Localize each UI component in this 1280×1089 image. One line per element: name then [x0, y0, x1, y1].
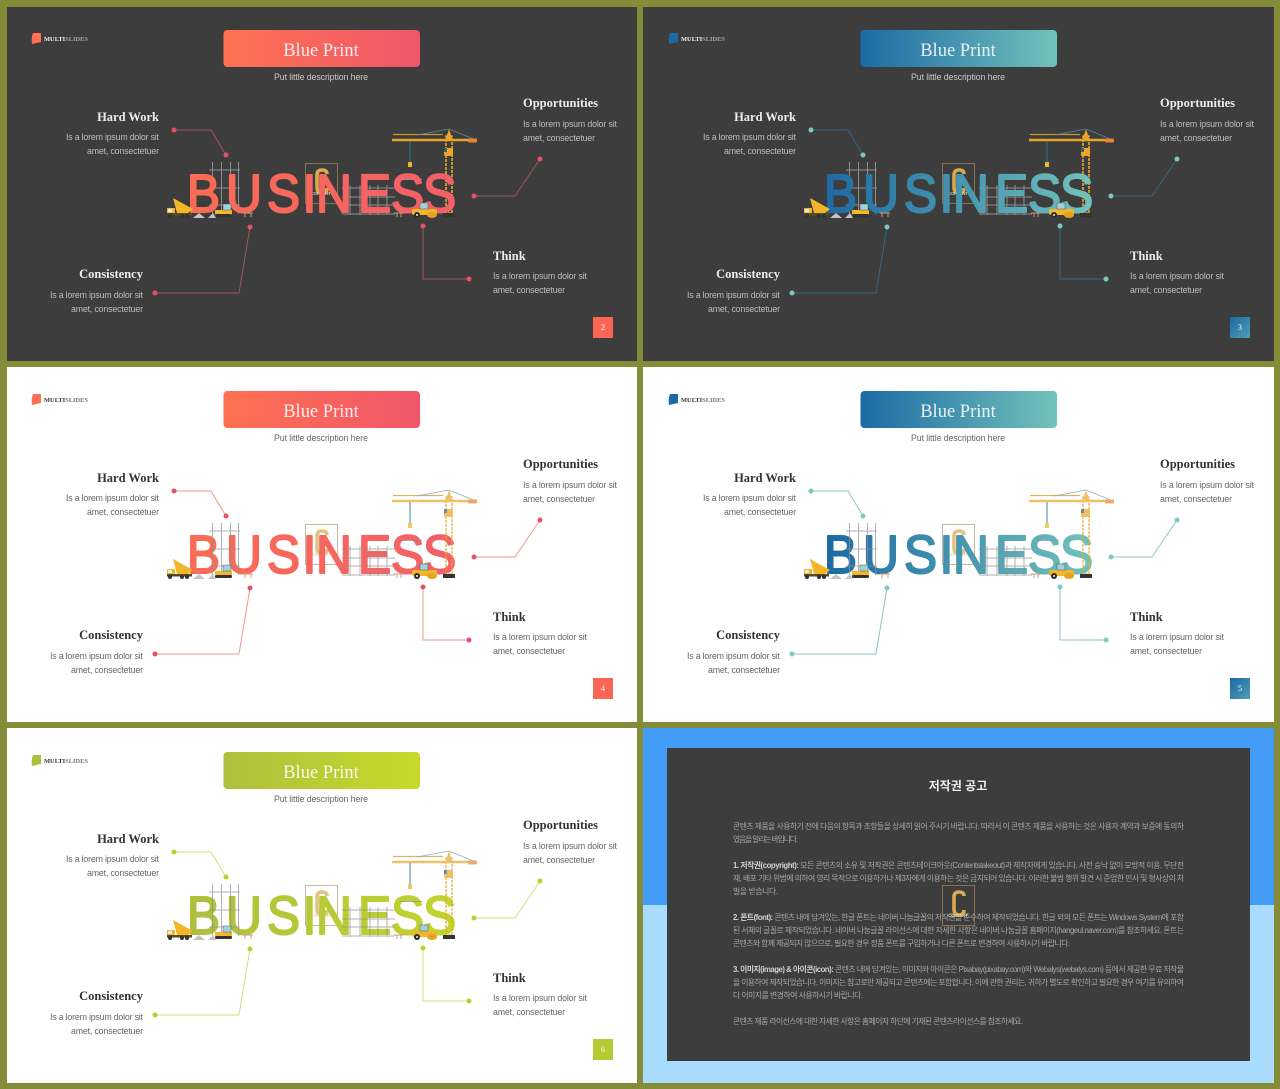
text block: intro — [733, 821, 1184, 844]
panel: slide 3 dark blue — [643, 7, 1274, 361]
word: BUSINESS: BUSINESS — [824, 163, 1093, 223]
callout: Think: Think — [1130, 610, 1163, 624]
logo — [32, 394, 88, 405]
callout: Opportunities — [523, 96, 618, 143]
connectors — [792, 491, 1177, 654]
heading: copyright notice: 저작권 공고 — [929, 778, 987, 793]
text block: font: 콘텐츠와 함께 제공되지 않으므로, 필요한 경우 정품 폰트를 구입하거나 다른 폰트로 변경하여 사용하시기 바랍니다. — [733, 938, 1070, 948]
connectors — [155, 130, 540, 293]
callout: Hard Work: amet, consectetuer — [87, 507, 159, 517]
callout: Consistency: amet, consectetuer — [71, 1026, 143, 1036]
callout: Think: amet, consectetuer — [493, 285, 565, 295]
callout: Hard Work: Hard Work — [734, 471, 796, 485]
text block: copyright: 벌을 받습니다. — [733, 886, 778, 896]
text block: images and icons: 을 이용하여 제작되었습니다. 이미지는 참고로만 제공되고 콘텐츠에는 포함합니다. 이에 관한 권리는, 귀하가 별도로 확인하고 필요한 경우 여기를 유의하여 — [733, 977, 1184, 987]
text block: font — [733, 912, 1184, 948]
page number: 3 — [1238, 323, 1242, 332]
callout: Consistency: amet, consectetuer — [708, 304, 780, 314]
vehicles — [804, 198, 1092, 218]
panel: slide 6 white green — [7, 728, 637, 1083]
callout: Opportunities: Opportunities — [523, 457, 598, 471]
word: BUSINESS: BUSINESS — [824, 524, 1093, 584]
callout: Hard Work: Is a lorem ipsum dolor sit — [66, 493, 160, 503]
logo — [32, 755, 88, 766]
panel: slide 5 white blue — [643, 367, 1274, 722]
callout: Consistency: Is a lorem ipsum dolor sit — [50, 651, 144, 661]
logo — [32, 33, 88, 44]
callout: Opportunities — [523, 457, 618, 504]
callout: Consistency — [687, 267, 781, 314]
text block: font: 된 서체의 글꼴로 제작되었습니다. 네이버 나눔글꼴 라이선스에 대한 자세한 사항은 네이버 나눔글꼴 홈페이지(hangeul.naver.com)를 참조하세요. 폰트는 — [733, 925, 1184, 935]
callout: Opportunities: Is a lorem ipsum dolor sit — [1160, 119, 1255, 129]
title button — [224, 752, 420, 789]
callout: Consistency — [50, 267, 144, 314]
subtitle: Put little description here — [274, 433, 368, 443]
text block: copyright — [733, 860, 1184, 896]
emblem — [942, 164, 974, 204]
word: BUSINESS: BUSINESS — [187, 885, 456, 945]
callout: Consistency: Consistency — [79, 989, 144, 1003]
text block: intro: 였음을 알리는 바입니다. — [733, 834, 798, 844]
word: BUSINESS: BUSINESS — [187, 524, 456, 584]
callout: Opportunities: Opportunities — [1160, 96, 1235, 110]
connectors — [155, 852, 540, 1015]
title button: Blue Print — [920, 402, 997, 422]
callout: Opportunities: Opportunities — [523, 818, 598, 832]
callout: Consistency — [50, 628, 144, 675]
logo — [669, 394, 725, 405]
logo: MULTISLIDES — [44, 397, 88, 404]
callout: Hard Work — [703, 110, 797, 156]
callout: Think: amet, consectetuer — [1130, 646, 1202, 656]
vehicles — [167, 559, 455, 579]
callout: Think: Is a lorem ipsum dolor sit — [493, 993, 588, 1003]
callout: Opportunities: amet, consectetuer — [1160, 133, 1232, 143]
callout: Hard Work: amet, consectetuer — [724, 507, 796, 517]
callout: Opportunities — [1160, 457, 1255, 504]
callout: Hard Work — [66, 110, 160, 156]
connector dots — [790, 488, 1180, 656]
callout: Hard Work: Hard Work — [734, 110, 796, 124]
subtitle: Put little description here — [274, 794, 368, 804]
text block: images and icons: 3. 이미지(image) & 아이콘(icon): 콘텐츠 내에 담겨있는, 이미지와 아이콘은 Pixabay(pixabay.com)와 Webalys(webalys.com) 등에서 제공한 무료 저작물 — [733, 964, 1184, 974]
callout: Hard Work — [66, 471, 160, 517]
title button: Blue Print — [283, 763, 360, 783]
title button — [224, 391, 420, 428]
emblem — [306, 524, 338, 564]
callout: Opportunities — [523, 818, 618, 865]
text block: font: 2. 폰트(font): 콘텐츠 내에 담겨있는, 한글 폰트는 네이버 나눔글꼴의 저작권을 준수하여 제작되었습니다. 한글 외의 모든 폰트는 Windows System에 포함 — [733, 912, 1184, 922]
emblem — [306, 886, 338, 926]
callout: Opportunities: Opportunities — [523, 96, 598, 110]
word: BUSINESS: BUSINESS — [187, 163, 456, 223]
callout: Think: amet, consectetuer — [493, 646, 565, 656]
callout: Opportunities: amet, consectetuer — [523, 133, 595, 143]
callout: Opportunities: Is a lorem ipsum dolor sit — [523, 480, 618, 490]
emblem — [942, 524, 974, 564]
connector dots — [152, 128, 542, 296]
text block: copyright: 1. 저작권(copyright): 모든 콘텐츠의 소유 및 저작권은 콘텐츠테이크아웃(Contentstakeout)과 제작자에게 있습니다. 사전 승낙 없이 모방적 이용, 무단전 — [733, 860, 1184, 870]
logo: MULTISLIDES — [681, 36, 725, 43]
page number — [1230, 678, 1250, 699]
callout: Opportunities: amet, consectetuer — [1160, 494, 1232, 504]
callout: Hard Work: Is a lorem ipsum dolor sit — [66, 132, 160, 142]
callout: Think: Think — [493, 971, 526, 985]
callout: Hard Work: Is a lorem ipsum dolor sit — [703, 493, 797, 503]
callout: Consistency: Consistency — [79, 628, 144, 642]
title button: Blue Print — [283, 41, 360, 61]
callout: Hard Work — [703, 471, 797, 517]
title button — [860, 30, 1057, 67]
callout: Hard Work: amet, consectetuer — [724, 146, 796, 156]
page number — [1230, 317, 1250, 338]
vehicles — [167, 920, 455, 940]
illustration: construction — [846, 129, 1114, 215]
callout: Opportunities: Opportunities — [1160, 457, 1235, 471]
illustration: construction — [846, 490, 1114, 576]
connectors — [155, 491, 540, 654]
callout: Think: Think — [1130, 249, 1163, 263]
callout: Consistency: Is a lorem ipsum dolor sit — [50, 1012, 144, 1022]
panel: copyright notice — [643, 728, 1274, 1083]
callout: Consistency: amet, consectetuer — [708, 665, 780, 675]
callout: Consistency — [687, 628, 781, 675]
callout: Hard Work: Hard Work — [97, 110, 159, 124]
callout: Opportunities: Is a lorem ipsum dolor sit — [523, 119, 618, 129]
callout: Opportunities: amet, consectetuer — [523, 494, 595, 504]
callout: Consistency: Is a lorem ipsum dolor sit — [687, 290, 781, 300]
subtitle: Put little description here — [274, 72, 368, 82]
subtitle: Put little description here — [911, 72, 1005, 82]
callout: Think — [493, 610, 588, 656]
panel: slide 2 dark coral — [7, 7, 637, 361]
callout: Think: amet, consectetuer — [1130, 285, 1202, 295]
illustration: construction — [209, 851, 477, 937]
callout: Think: Is a lorem ipsum dolor sit — [1130, 632, 1225, 642]
vehicles — [167, 198, 455, 218]
callout: Hard Work: Hard Work — [97, 832, 159, 846]
title button: Blue Print — [283, 402, 360, 422]
title button: Blue Print — [920, 41, 997, 61]
callout: Consistency: Is a lorem ipsum dolor sit — [687, 651, 781, 661]
connectors — [792, 130, 1177, 293]
page number: 6 — [601, 1045, 605, 1054]
watermark: gold emblem — [942, 886, 974, 926]
logo: MULTISLIDES — [44, 36, 88, 43]
callout: Think — [1130, 249, 1225, 295]
connector dots — [152, 850, 542, 1018]
callout: Think — [493, 971, 588, 1017]
callout: Consistency — [50, 989, 144, 1036]
text block: license note: 콘텐츠 제품 라이선스에 대한 자세한 사항은 홈페이지 하단에 기재된 콘텐츠라이선스를 참조하세요. — [733, 1016, 1023, 1026]
callout: Think: Is a lorem ipsum dolor sit — [493, 271, 588, 281]
callout: Think: Think — [493, 610, 526, 624]
callout: Consistency: Consistency — [79, 267, 144, 281]
callout: Hard Work: amet, consectetuer — [87, 868, 159, 878]
callout: Hard Work — [66, 832, 160, 878]
callout: Consistency: Consistency — [716, 267, 781, 281]
illustration: construction — [209, 490, 477, 576]
callout: Hard Work: amet, consectetuer — [87, 146, 159, 156]
logo: MULTISLIDES — [681, 397, 725, 404]
emblem — [306, 164, 338, 204]
title button — [860, 391, 1057, 428]
callout: Think — [1130, 610, 1225, 656]
callout: Hard Work: Is a lorem ipsum dolor sit — [66, 854, 160, 864]
logo — [669, 33, 725, 44]
page number — [593, 1039, 613, 1060]
callout: Consistency: Is a lorem ipsum dolor sit — [50, 290, 144, 300]
illustration: construction — [209, 129, 477, 215]
callout: Think: amet, consectetuer — [493, 1007, 565, 1017]
page number — [593, 317, 613, 338]
callout: Think: Is a lorem ipsum dolor sit — [493, 632, 588, 642]
page number: 5 — [1238, 684, 1242, 693]
connector dots — [152, 488, 542, 656]
page number — [593, 678, 613, 699]
callout: Think — [493, 249, 588, 295]
callout: Consistency: amet, consectetuer — [71, 304, 143, 314]
subtitle: Put little description here — [911, 433, 1005, 443]
text block: copyright: 재, 배포 기타 위법에 의하여 영리 목적으로 이용하거나 제3자에게 이용하는 것은 금지되어 있습니다. 이러한 불법 행위 발견 시 준엄한 민사 및 형사상의 처 — [733, 873, 1184, 883]
vehicles — [804, 559, 1092, 579]
callout: Hard Work: Is a lorem ipsum dolor sit — [703, 132, 797, 142]
text block: intro: 콘텐츠 제품을 사용하기 전에 다음의 항목과 조항들을 상세히 읽어 주시기 바랍니다. 따라서 이 콘텐츠 제품을 사용하는 것은 사용자 계약과 보증에 동의하 — [733, 821, 1184, 831]
panel: slide 4 white coral — [7, 367, 637, 722]
callout: Hard Work: Hard Work — [97, 471, 159, 485]
callout: Think: Is a lorem ipsum dolor sit — [1130, 271, 1225, 281]
callout: Think: Think — [493, 249, 526, 263]
callout: Consistency: amet, consectetuer — [71, 665, 143, 675]
callout: Consistency: Consistency — [716, 628, 781, 642]
title button — [224, 30, 420, 67]
page number: 2 — [601, 323, 605, 332]
connector dots — [790, 128, 1180, 296]
callout: Opportunities: Is a lorem ipsum dolor sit — [1160, 480, 1255, 490]
text block: images and icons: 다 이미지를 변경하여 사용하시기 바랍니다. — [733, 990, 863, 1000]
text block: images and icons — [733, 964, 1184, 1000]
logo: MULTISLIDES — [44, 758, 88, 765]
page number: 4 — [601, 684, 605, 693]
callout: Opportunities: Is a lorem ipsum dolor sit — [523, 841, 618, 851]
callout: Opportunities: amet, consectetuer — [523, 855, 595, 865]
callout: Opportunities — [1160, 96, 1255, 143]
